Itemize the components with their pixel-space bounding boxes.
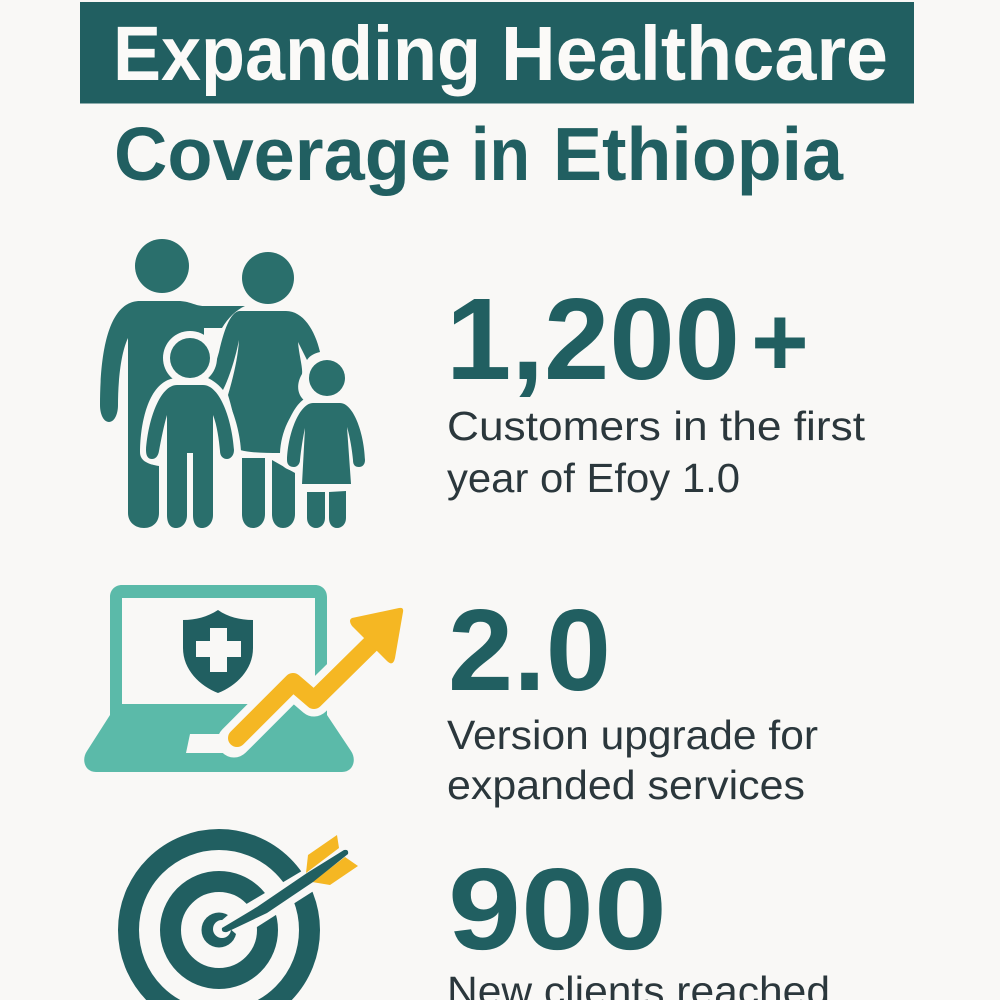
title banner: Healthcare xyxy=(501,11,888,97)
subtitle heading xyxy=(114,112,844,196)
big number: 900: 900 xyxy=(448,844,667,974)
description: version upgrade: Version upgrade for xyxy=(447,712,818,758)
description: version upgrade xyxy=(447,712,818,808)
growth arrow xyxy=(237,635,380,738)
description: customers xyxy=(447,403,866,501)
big number: 1,200+: + xyxy=(751,286,809,397)
description: version upgrade: expanded services xyxy=(447,762,805,808)
icon: family xyxy=(100,239,371,532)
laptop xyxy=(84,585,354,772)
trackpad xyxy=(186,734,240,753)
big number: 2.0: 2.0 xyxy=(448,585,611,715)
subtitle heading: Coverage xyxy=(114,112,451,196)
arrow halo xyxy=(234,645,370,741)
subtitle heading: in xyxy=(471,112,530,196)
big number: 1,200+: 1,200 xyxy=(446,274,740,404)
title banner xyxy=(80,2,914,104)
title banner: Expanding xyxy=(113,11,481,97)
shield xyxy=(183,610,253,693)
description: customers: Customers in the first xyxy=(447,403,866,449)
icon: laptop with shield and growth arrow xyxy=(84,585,403,772)
subtitle heading: Ethiopia xyxy=(553,112,844,196)
icon: target with dart xyxy=(128,835,358,1000)
medical cross xyxy=(196,628,241,672)
description: customers: year of Efoy 1.0 xyxy=(447,455,740,501)
